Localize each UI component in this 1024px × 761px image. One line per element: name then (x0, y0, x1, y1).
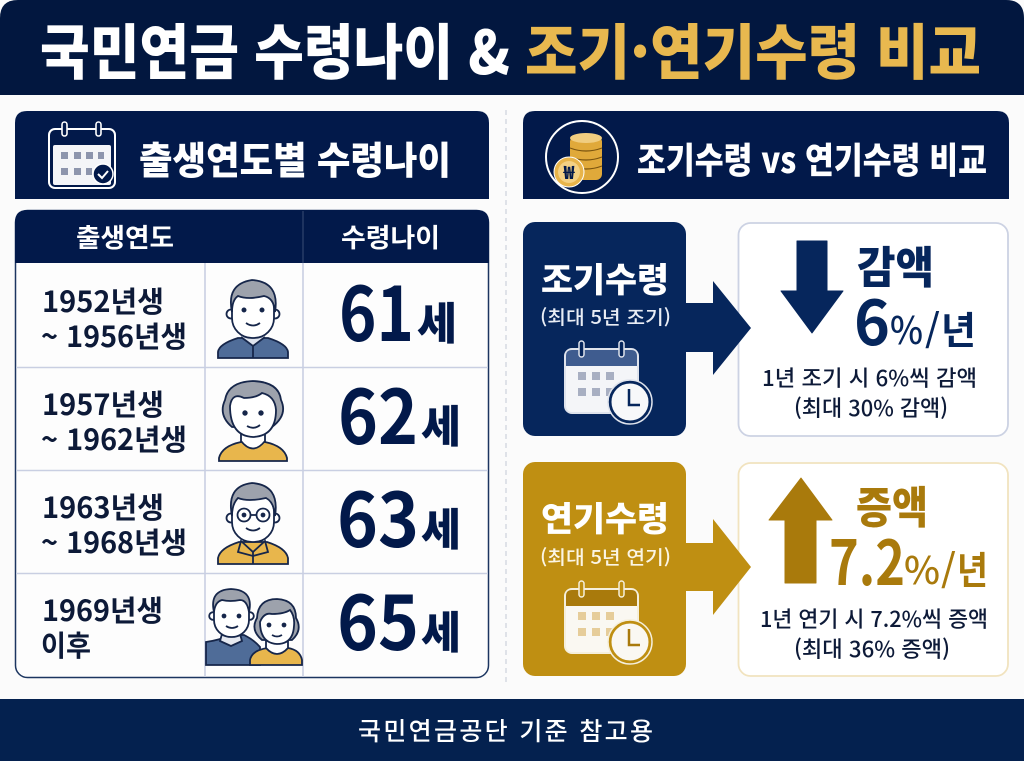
table header (15, 210, 489, 263)
row: 1957-1962: 세 (421, 391, 461, 455)
title text (40, 5, 981, 92)
icon: older man (218, 280, 288, 358)
title text: 국민연금 수령나이 & (40, 5, 510, 92)
row: 1963-1968: ~ 1968년생 (41, 520, 187, 562)
icon: calendar with clock (565, 581, 652, 664)
increase figure: 7.2 (829, 513, 905, 603)
row: 1969 onward: 1969년생 (42, 588, 163, 630)
reduction figure (854, 232, 976, 363)
row: 1952-1956: 1952년생 (42, 279, 164, 321)
arrow: early to result (686, 281, 751, 375)
footer (0, 699, 1024, 761)
row: 1952-1956: ~ 1956년생 (41, 314, 187, 356)
panel: deferred claim: 연기수령 (541, 492, 669, 541)
panel: early result (738, 223, 1008, 436)
description (760, 602, 988, 664)
panel heading: comparison (523, 111, 1009, 199)
panel: deferred claim: (최대 5년 연기) (540, 543, 671, 570)
icon: calendar with clock (565, 341, 652, 424)
icon: calendar with check (49, 122, 115, 188)
row: 1957-1962: ~ 1962년생 (41, 417, 187, 459)
arrow: deferred to result (686, 519, 751, 615)
row: 1969 onward: 65 (337, 563, 419, 672)
reduction figure: 감액 (857, 232, 934, 296)
row: 1957-1962: 62 (338, 357, 418, 466)
increase figure (829, 472, 988, 603)
panel: deferred claim (523, 462, 686, 676)
icon: older woman (219, 381, 287, 461)
row: 1969 onward: 세 (421, 597, 461, 661)
row: 1963-1968: 63 (337, 460, 419, 569)
panel: early claim: 조기수령 (541, 253, 669, 302)
panel: deferred result (738, 463, 1008, 676)
title text: 조기·연기수령 비교 (525, 5, 981, 92)
arrow: up (769, 478, 832, 583)
table header: 수령나이 (341, 218, 440, 255)
panel: early claim (523, 222, 686, 436)
reduction figure: % (890, 300, 923, 355)
row: 1963-1968 (41, 460, 461, 569)
row: 1952-1956: 61 (339, 254, 414, 363)
description: (최대 30% 감액) (794, 391, 948, 423)
title banner (0, 0, 1024, 95)
table header: 출생연도 (76, 218, 174, 255)
reduction figure: 년 (941, 300, 976, 355)
row: 1952-1956: 세 (417, 288, 457, 352)
icon: man with glasses (218, 483, 288, 564)
panel: early claim: (최대 5년 조기) (540, 303, 671, 330)
description: 1년 조기 시 6%씩 감액 (762, 361, 977, 393)
increase figure: / (941, 540, 956, 595)
description (762, 361, 977, 423)
description: (최대 36% 증액) (794, 632, 950, 664)
heading text: 출생연도별 수령나이 (139, 130, 451, 185)
row: 1963-1968: 세 (421, 494, 461, 558)
row: 1957-1962: 1957년생 (42, 382, 164, 424)
reduction figure: / (925, 300, 940, 355)
increase figure: 년 (957, 540, 988, 595)
divider (505, 110, 507, 682)
icon: couple (206, 589, 302, 665)
row: 1952-1956 (41, 254, 457, 363)
arrow: down (781, 241, 843, 333)
reduction figure: 6 (854, 273, 890, 363)
icon: coin stack with won: ₩ (563, 159, 576, 185)
increase figure: 증액 (856, 472, 928, 536)
row: 1963-1968: 1963년생 (42, 485, 164, 527)
row: 1969 onward (41, 563, 461, 672)
row: 1957-1962 (41, 357, 461, 466)
footer: 국민연금공단 기준 참고용 (358, 712, 653, 748)
table: pension age by birth year (15, 210, 489, 678)
row: 1969 onward: 이후 (41, 623, 91, 665)
increase figure: % (904, 540, 940, 595)
panel heading: birth year (15, 111, 489, 199)
icon: coin stack with won (546, 121, 618, 193)
description: 1년 연기 시 7.2%씩 증액 (760, 602, 988, 634)
